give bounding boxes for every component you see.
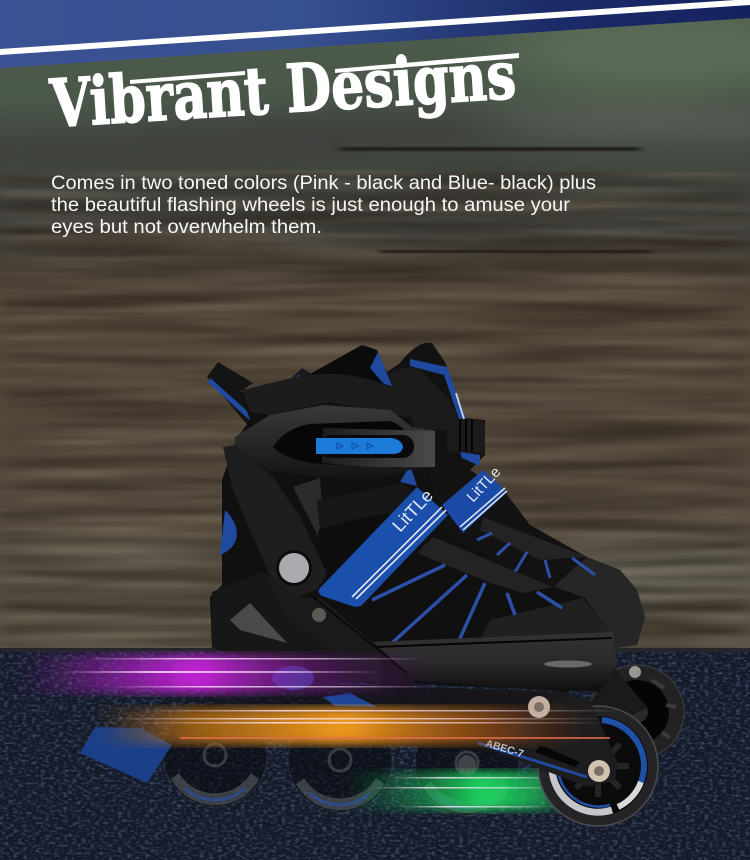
rear skate boot [387,343,645,650]
heel loop strap [207,362,312,428]
title: Vibrant Designs [47,36,518,143]
ankle cuff with buckle [235,405,435,478]
heel brake [80,727,172,783]
body text: Comes in two toned colors (Pink - black and Blue- black) plus [51,172,596,194]
front blue strap [318,485,448,607]
body text: eyes but not overwhelm them. [51,216,322,238]
sole [373,632,617,692]
body text [51,172,596,238]
axle rivets [458,696,610,782]
heel shell with mesh vent [212,572,400,684]
blue buckle lever [316,438,403,454]
green light streak [350,772,560,810]
side blue patch [220,510,237,555]
orange light streak [100,708,620,744]
front blue strap: LitTLe [388,485,437,536]
road surface [0,648,750,860]
inner lining panels [293,478,323,540]
frame arm with ABEC-7 label: ABEC-7 [484,737,525,760]
front skate boot [210,345,617,692]
skate frame [80,650,647,783]
header banner [0,0,750,68]
purple light streak [20,655,440,693]
carbon support arm with silver pivot [223,445,420,686]
buckle clip [322,428,435,467]
rear vamp blue stripes [477,533,595,578]
rear strap [442,464,507,533]
push button oval [272,666,314,690]
ghost wheels in motion [163,703,519,815]
toe cap [477,598,613,650]
body text: the beautiful flashing wheels is just enough to amuse your [51,194,571,216]
front vamp blue stripes [372,565,562,645]
rear strap: LitTLe [463,464,504,506]
front wheel [538,706,658,826]
vamp black panel [417,537,553,593]
rear wheel [590,665,684,759]
frame arm with ABEC-7 label [478,695,618,787]
